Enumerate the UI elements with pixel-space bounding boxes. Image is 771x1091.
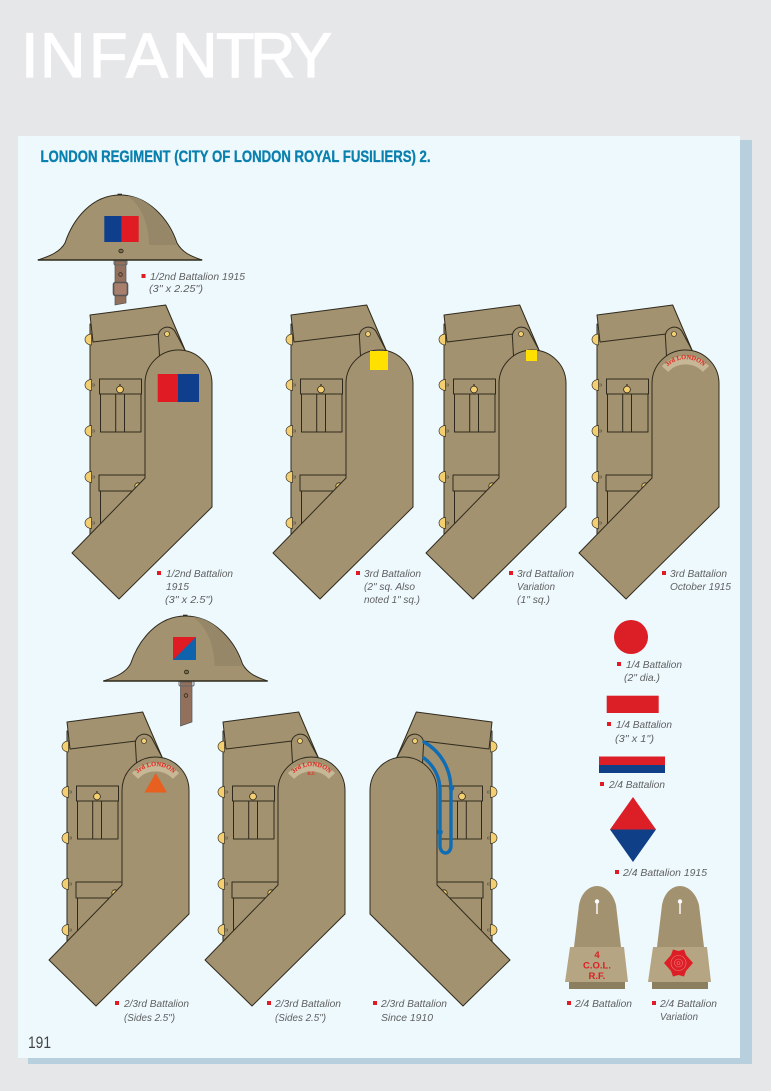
caption: 2/4 Battalion 1915	[622, 867, 707, 879]
badge: red circle	[614, 620, 648, 654]
caption: 2/3rd Battalion	[123, 998, 189, 1010]
caption: (Sides 2.5")	[275, 1012, 326, 1024]
helmet badge	[173, 637, 196, 660]
caption: (2" dia.)	[624, 672, 660, 684]
caption: October 1915	[670, 581, 731, 593]
caption: (3" x 1")	[615, 733, 654, 745]
slot	[595, 899, 599, 914]
caption	[157, 568, 233, 606]
caption: (2" sq. Also	[364, 581, 415, 593]
caption: Since 1910	[381, 1012, 433, 1024]
caption	[652, 998, 717, 1023]
caption: 1/2nd Battalion 1915	[150, 271, 245, 283]
caption: noted 1" sq.)	[364, 594, 420, 606]
title: INFANTRY	[21, 21, 332, 91]
epaulette text	[583, 950, 611, 982]
panel shadow	[28, 140, 752, 1064]
caption: 2/3rd Battalion	[274, 998, 341, 1010]
caption: (3" x 2.5")	[165, 594, 213, 606]
caption: 2/4 Battalion	[574, 998, 632, 1010]
shoulder title	[288, 762, 335, 779]
caption: 3rd Battalion	[364, 568, 421, 580]
helmet strap	[179, 681, 194, 726]
small yellow square badge	[526, 350, 537, 361]
caption: 1/4 Battalion	[616, 719, 672, 731]
jacket: 2/3rd Battalion since 1910 (mirrored)	[370, 712, 510, 1006]
slot	[678, 899, 682, 914]
badge: red rectangle	[607, 696, 659, 713]
epaulette: 4 C.O.L. R.F.	[565, 886, 628, 989]
jacket: 1/2nd Battalion 1915	[72, 305, 212, 599]
main panel	[18, 136, 740, 1058]
jacket: 2/3rd Battalion with triangle	[48, 712, 190, 1006]
blue cord	[424, 742, 454, 853]
caption: 2/4 Battalion	[608, 779, 665, 791]
helmet badge	[104, 216, 139, 242]
caption	[267, 998, 341, 1024]
caption: (3" x 2.25")	[149, 283, 203, 295]
yellow square badge	[370, 351, 388, 370]
epaulette: rose variation	[648, 886, 711, 989]
caption: 2/4 Battalion	[659, 998, 717, 1010]
shoulder title: 3rd LONDON	[135, 762, 176, 774]
caption: 3rd Battalion	[670, 568, 727, 580]
helmet strap	[114, 260, 128, 305]
caption	[373, 998, 447, 1024]
shoulder title: 3rd LONDON	[665, 354, 706, 366]
caption	[509, 568, 574, 606]
caption: 2/3rd Battalion	[380, 998, 447, 1010]
jacket: 3rd Battalion October 1915	[578, 304, 720, 600]
orange triangle	[144, 773, 167, 792]
heading: LONDON REGIMENT (CITY OF LONDON ROYAL FUSILIERS) 2.	[40, 147, 430, 166]
helmet: 1/2nd Battalion	[38, 194, 202, 305]
caption	[142, 271, 245, 295]
shoulder title: R.F.	[307, 772, 316, 777]
epaulette text: R.F.	[589, 971, 605, 982]
caption: Variation	[517, 581, 555, 593]
page number: 191	[28, 1034, 51, 1052]
jacket: 2/3rd Battalion with R.F. title	[204, 712, 346, 1006]
epaulette text: C.O.L.	[583, 960, 611, 972]
caption	[617, 659, 682, 684]
caption	[115, 998, 189, 1024]
caption	[607, 719, 672, 745]
sleeve badge	[158, 374, 199, 402]
jacket: 3rd Battalion variation	[426, 305, 566, 599]
caption: (1" sq.)	[517, 594, 550, 606]
caption: 1/4 Battalion	[626, 659, 682, 671]
caption: 3rd Battalion	[517, 568, 574, 580]
epaulette text: 4	[594, 950, 600, 961]
jacket: 3rd Battalion	[273, 305, 413, 599]
rose emblem	[664, 950, 693, 976]
caption: 1/2nd Battalion	[166, 568, 233, 580]
shoulder title	[662, 354, 709, 372]
caption: 1915	[166, 581, 189, 593]
badge: red and blue stripe	[599, 756, 665, 773]
caption: (Sides 2.5")	[124, 1012, 175, 1024]
caption	[662, 568, 731, 593]
shoulder title	[132, 762, 179, 779]
caption	[356, 568, 421, 606]
helmet: 2/3rd Battalion	[104, 616, 268, 726]
badge: red and blue diamond	[610, 797, 656, 862]
shoulder title: 3rd LONDON	[291, 762, 332, 774]
caption: Variation	[660, 1011, 698, 1023]
